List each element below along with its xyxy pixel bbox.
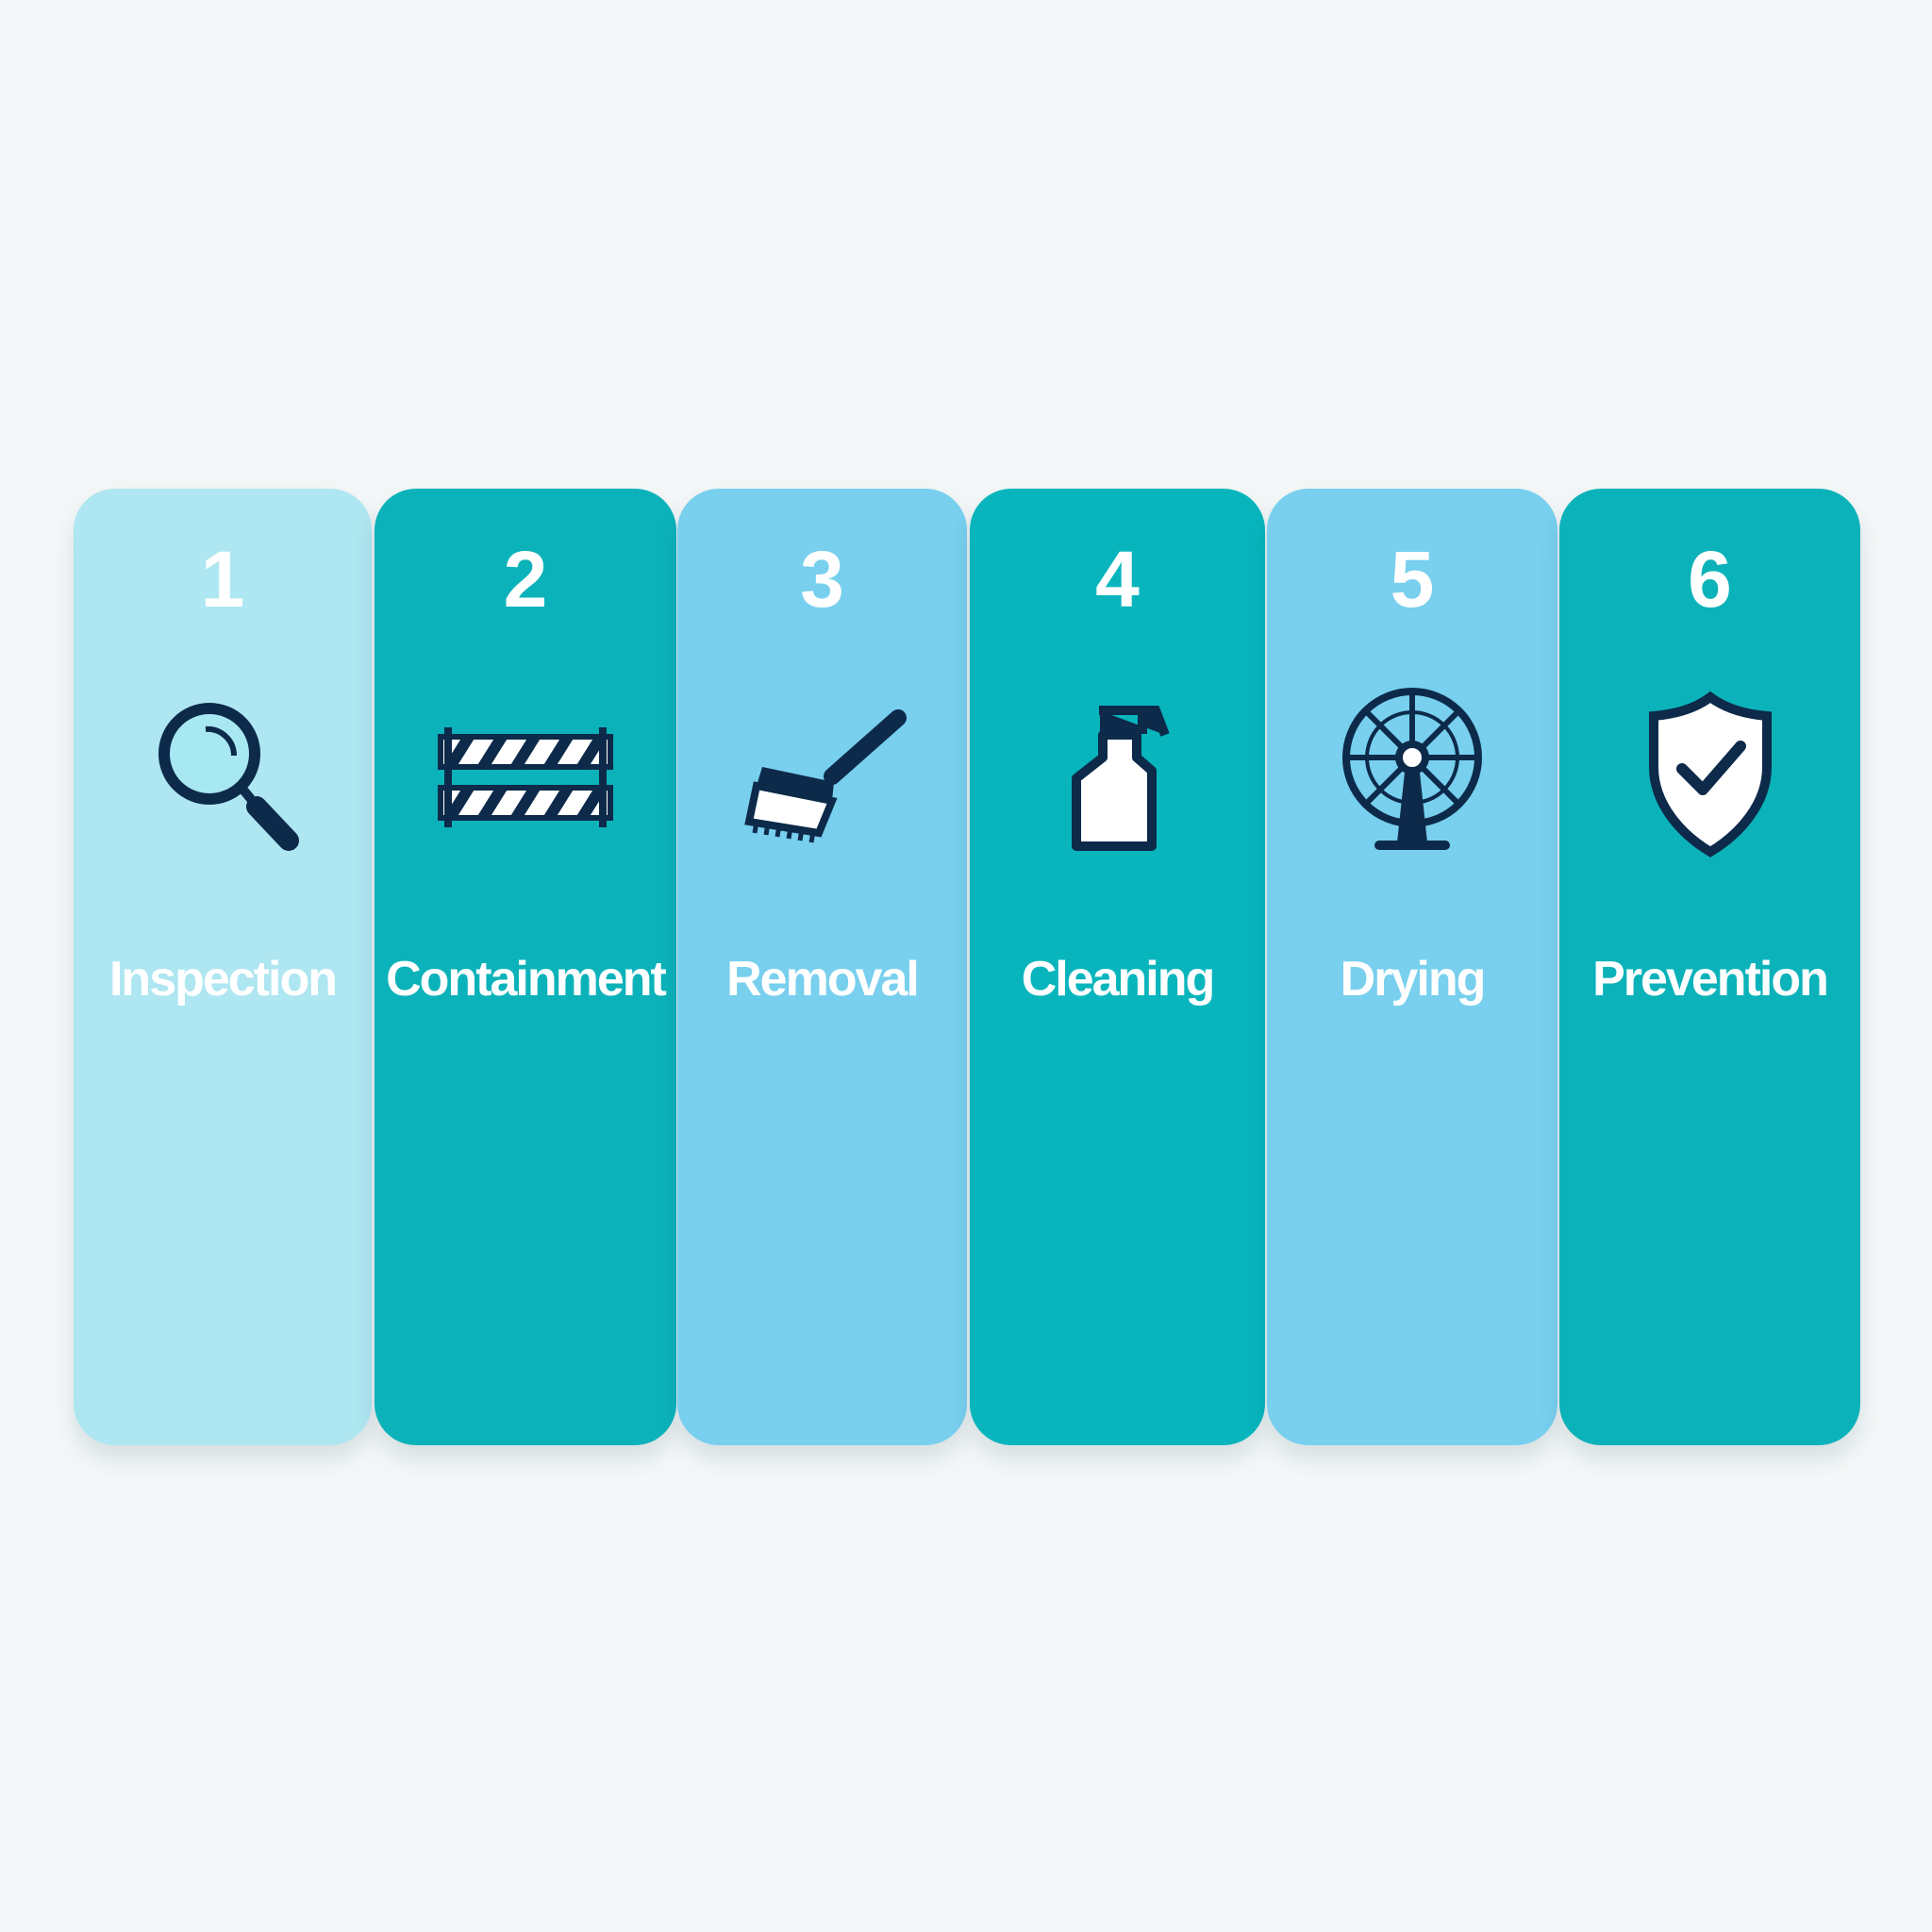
label: Removal: [726, 952, 918, 1007]
label: Drying: [1341, 952, 1484, 1007]
number 4: 4: [1095, 535, 1140, 624]
panel: 1 Inspection: [74, 489, 372, 1445]
panel: 3 Removal: [677, 489, 967, 1445]
icon: spray bottle: [1072, 706, 1170, 851]
number 6: 6: [1688, 535, 1732, 624]
number 3: 3: [800, 535, 844, 624]
label: Inspection: [109, 952, 336, 1007]
panel: 6 Prevention: [1559, 489, 1860, 1445]
icon: fan: [1342, 688, 1482, 850]
icon: scraper brush: [744, 709, 907, 843]
panel: 2 Containment: [375, 489, 676, 1445]
icon: shield check: [1649, 691, 1772, 858]
panel: 4 Cleaning: [970, 489, 1265, 1445]
number 5: 5: [1391, 535, 1434, 624]
label: Cleaning: [1022, 952, 1213, 1007]
icon: magnifier: [158, 703, 299, 851]
number 2: 2: [504, 535, 547, 624]
number 1: 1: [201, 535, 244, 624]
label: Prevention: [1592, 952, 1827, 1007]
label: Containment: [386, 952, 665, 1007]
icon: barrier: [438, 727, 613, 827]
panel: 5 Drying: [1267, 489, 1557, 1445]
